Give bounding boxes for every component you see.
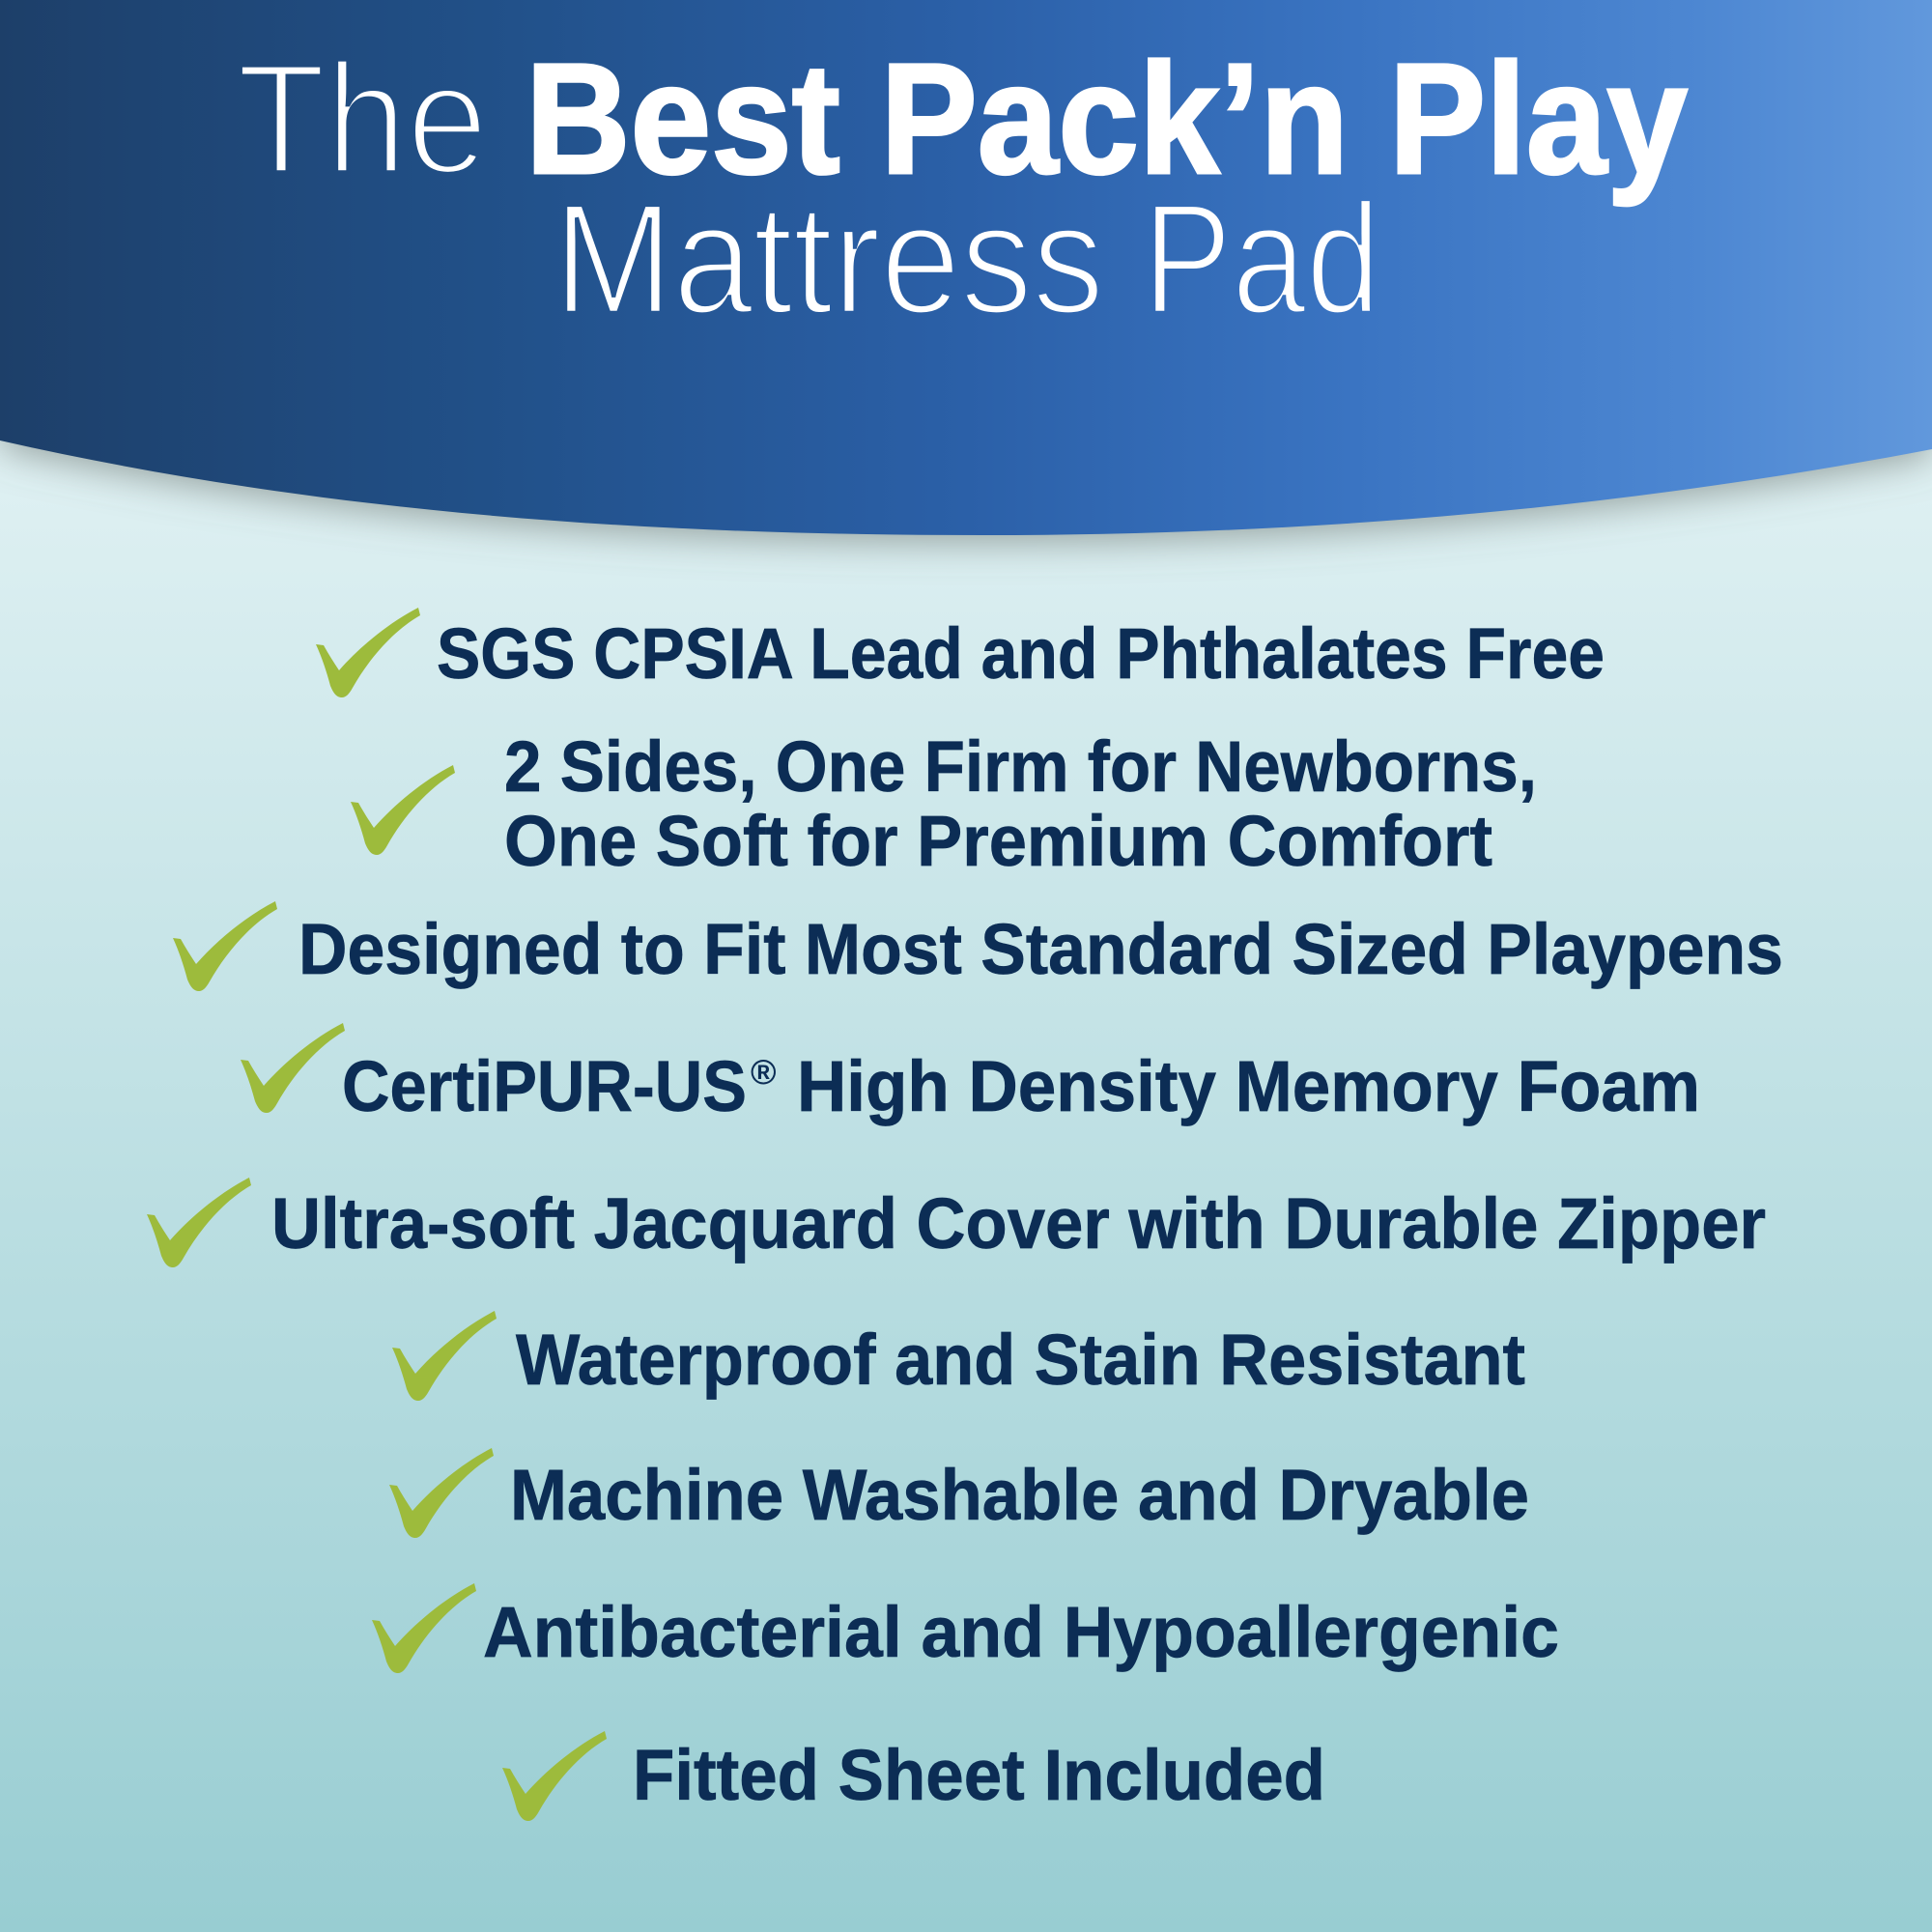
feature 1: SGS CPSIA Lead and Phthalates Free <box>437 613 1605 694</box>
icon: check mark <box>389 1448 494 1538</box>
feature 4: ® <box>751 1052 777 1092</box>
icon: check mark <box>241 1023 345 1113</box>
feature 8: Antibacterial and Hypoallergenic <box>483 1592 1559 1672</box>
feature 4 <box>241 1023 1700 1126</box>
feature 9: Fitted Sheet Included <box>633 1735 1325 1815</box>
title: The <box>237 30 488 207</box>
icon: check mark <box>392 1311 497 1401</box>
feature 6: Waterproof and Stain Resistant <box>516 1320 1525 1400</box>
feature 2: 2 Sides, One Firm for Newborns, <box>504 726 1537 807</box>
title: Mattress <box>554 170 1104 347</box>
feature 5: Ultra-soft Jacquard Cover with Durable Zipper <box>271 1183 1766 1264</box>
icon: check mark <box>351 765 455 855</box>
icon: check mark <box>173 901 277 991</box>
feature 3: Designed to Fit Most Standard Sized Playpens <box>298 909 1783 989</box>
title: Pad <box>1143 170 1380 347</box>
feature 2: One Soft for Premium Comfort <box>504 801 1492 881</box>
header banner <box>0 0 1932 535</box>
header shadow <box>0 6 1932 541</box>
icon: check mark <box>372 1583 476 1673</box>
feature 7: Machine Washable and Dryable <box>510 1455 1529 1535</box>
feature 4: High Density Memory Foam <box>797 1046 1700 1126</box>
title: Best Pack’n Play <box>526 30 1688 207</box>
icon: check mark <box>316 608 420 697</box>
icon: check mark <box>147 1178 251 1267</box>
icon: check mark <box>502 1731 607 1821</box>
feature 2 <box>351 726 1537 881</box>
feature 4: CertiPUR-US <box>342 1046 747 1126</box>
title <box>237 30 1688 347</box>
